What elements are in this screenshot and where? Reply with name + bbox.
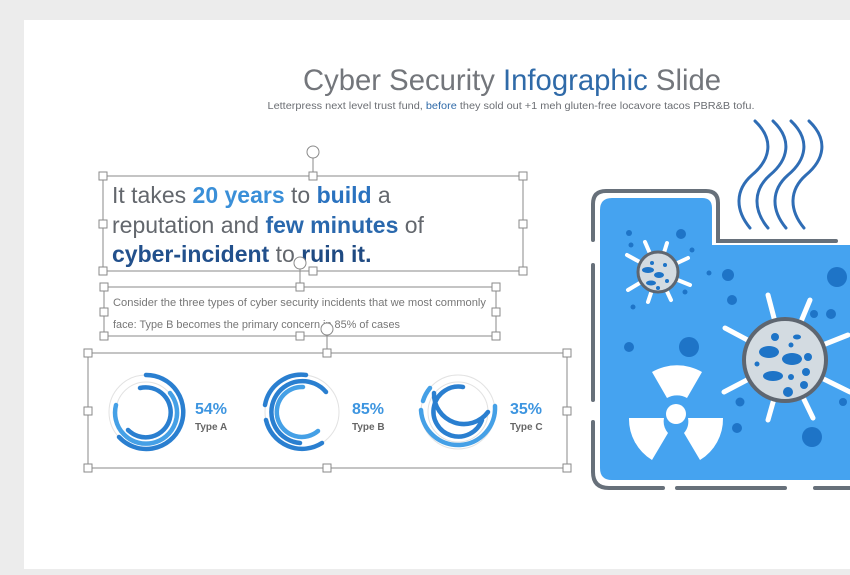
- quote text: reputation and few minutes of: [112, 212, 425, 238]
- subtitle: Letterpress next level trust fund, before they sold out +1 meh gluten-free locavore tacos PBR&B tofu.: [268, 100, 754, 112]
- quote text: It takes 20 years to build a: [112, 182, 391, 208]
- radiation symbol: [629, 365, 723, 460]
- title: Cyber Security Infographic Slide: [303, 64, 721, 97]
- spots: [624, 229, 847, 447]
- ring chart: Type B: 85%: [352, 401, 384, 418]
- big virus: [724, 295, 850, 420]
- ring chart: Type B: [265, 375, 385, 449]
- ring chart: Type B: Type B: [352, 422, 385, 433]
- quote text: [112, 182, 425, 267]
- ring chart: Type C: [421, 375, 543, 449]
- selection box: quote: [99, 146, 527, 275]
- description text: face: Type B becomes the primary concern in 85% of cases: [113, 319, 400, 331]
- ring chart: Type C: 35%: [510, 401, 542, 418]
- ring chart: Type A: 54%: [195, 401, 227, 418]
- icon: heat waves: [739, 121, 822, 228]
- icon: infected folder: [593, 191, 850, 488]
- ring chart: Type C: Type C: [510, 422, 543, 433]
- selection box: rings: [84, 323, 571, 472]
- description text: [113, 297, 486, 331]
- ring chart: Type A: [109, 375, 227, 449]
- description text: Consider the three types of cyber security incidents that we most commonly: [113, 297, 486, 309]
- ring chart: Type A: Type A: [195, 422, 227, 433]
- small virus: [627, 242, 690, 302]
- selection box: description: [100, 257, 500, 340]
- quote text: cyber-incident to ruin it.: [112, 241, 371, 267]
